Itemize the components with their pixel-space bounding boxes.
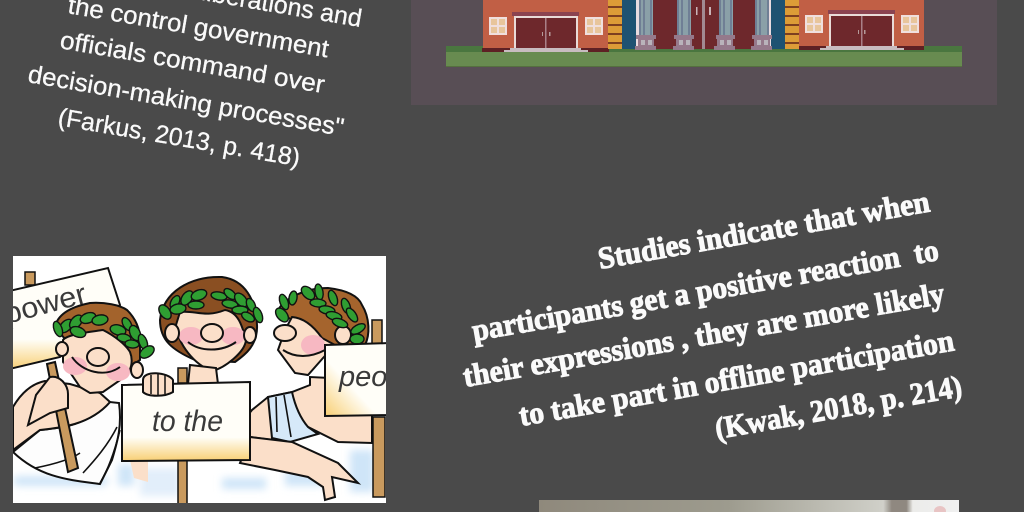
text block: Kwak study finding: their expressions , they are more likely <box>460 275 947 394</box>
sign: power <box>1 268 120 370</box>
grass lawn <box>446 46 962 67</box>
text block: Farkus quotation: decision-making processes" <box>26 60 346 142</box>
text block: Kwak study finding: participants get a positive reaction to <box>469 232 941 348</box>
text block: Kwak study finding: (Kwak, 2018, p. 214) <box>712 368 964 446</box>
sign: power: power <box>1 278 90 331</box>
wreath right <box>273 283 367 344</box>
illustration: power to the people clipart <box>13 256 386 503</box>
photo: cropped image at bottom right <box>539 500 959 512</box>
text block: Kwak study finding <box>460 184 964 446</box>
centre figure <box>160 277 257 384</box>
sign post: power <box>47 362 78 472</box>
text block: Kwak study finding: to take part in offline participation <box>516 323 957 433</box>
sign: to the <box>122 368 250 505</box>
text block: Farkus quotation <box>26 0 364 172</box>
building centre with columns <box>608 0 799 50</box>
sign: to the: to the <box>152 405 223 438</box>
sign: people: people <box>338 361 426 393</box>
building left wing <box>482 0 609 52</box>
panel: government building illustration <box>411 0 997 105</box>
leg behind sign <box>130 460 148 482</box>
wreath centre <box>156 286 264 324</box>
text block: Farkus quotation: (Farkus, 2013, p. 418) <box>56 103 302 172</box>
text block: Kwak study finding: Studies indicate that when <box>595 184 932 276</box>
left figure <box>13 303 143 484</box>
right figure <box>240 288 372 500</box>
wreath left <box>52 311 156 361</box>
robe shading <box>13 450 374 496</box>
sign: people <box>324 319 386 498</box>
building right wing <box>799 0 924 50</box>
text block: Farkus quotation: officials command over <box>58 26 327 99</box>
